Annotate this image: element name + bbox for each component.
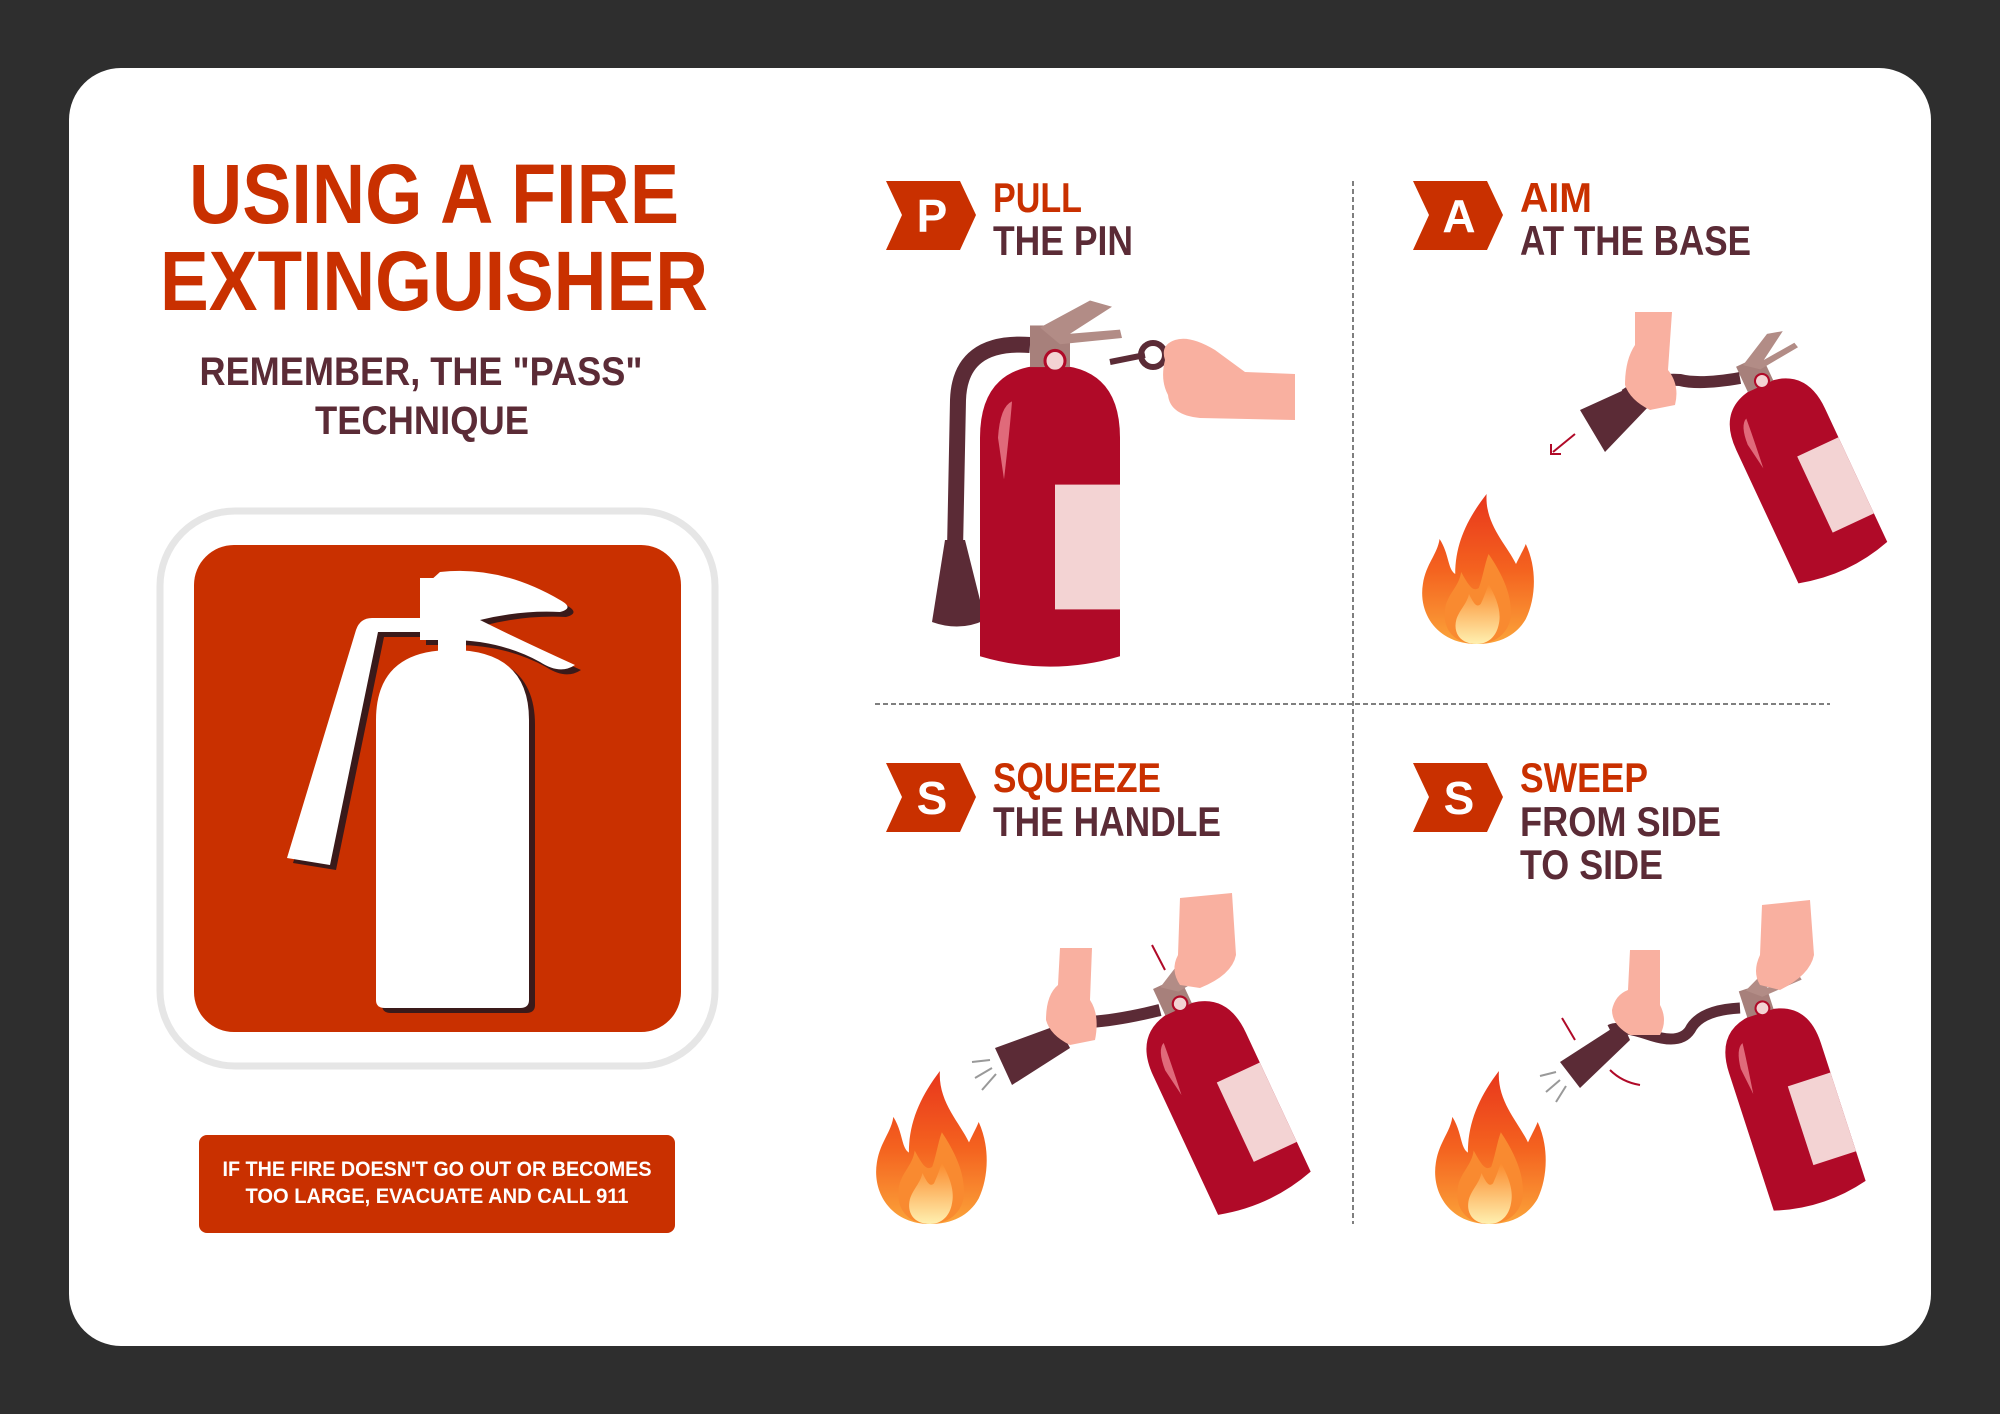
illustration: sweeping: [1435, 900, 1869, 1224]
heading: sweep from side to side: FROM SIDE: [1520, 798, 1721, 845]
panel: squeeze: [876, 754, 1315, 1224]
icon: flame: [1422, 494, 1534, 644]
callout: evacuate warning: [199, 1135, 675, 1233]
badge A: A: [1442, 190, 1476, 242]
title: EXTINGUISHER: [160, 234, 708, 328]
icon: flame: [876, 1071, 987, 1224]
badge S: S: [1444, 772, 1474, 824]
subtitle: REMEMBER, THE "PASS": [200, 350, 642, 394]
panel: aim: [1413, 174, 1891, 644]
illustration: squeezing: [876, 893, 1315, 1224]
icon: fire extinguisher sign: [160, 511, 715, 1066]
badge S: [1413, 763, 1503, 832]
title: [160, 147, 708, 328]
illustration: pulling pin: [932, 301, 1295, 667]
subtitle: [200, 350, 642, 443]
illustration: aiming: [1422, 312, 1891, 644]
panel: pull: [886, 174, 1295, 667]
callout: evacuate warning: TOO LARGE, EVACUATE AND CALL 911: [246, 1185, 629, 1208]
badge S: [886, 763, 976, 832]
heading: aim at the base: [1520, 174, 1751, 264]
heading: pull the pin: PULL: [993, 174, 1082, 221]
title: USING A FIRE: [189, 147, 679, 241]
badge S: S: [917, 772, 947, 824]
subtitle: TECHNIQUE: [315, 399, 529, 443]
heading: sweep from side to side: TO SIDE: [1520, 841, 1663, 888]
heading: sweep from side to side: SWEEP: [1520, 754, 1648, 801]
callout: evacuate warning: IF THE FIRE DOESN'T GO OUT OR BECOMES: [222, 1158, 652, 1181]
heading: squeeze the handle: SQUEEZE: [993, 754, 1161, 801]
badge P: P: [917, 190, 947, 242]
heading: aim at the base: AIM: [1520, 174, 1592, 221]
heading: pull the pin: THE PIN: [993, 217, 1133, 264]
dividers: [1352, 181, 1354, 1224]
icon: flame: [1435, 1071, 1546, 1224]
heading: sweep from side to side: [1520, 754, 1721, 888]
panel: sweep: [1413, 754, 1869, 1224]
heading: squeeze the handle: [993, 754, 1221, 845]
heading: aim at the base: AT THE BASE: [1520, 217, 1751, 264]
heading: squeeze the handle: THE HANDLE: [993, 798, 1221, 845]
heading: pull the pin: [993, 174, 1133, 264]
badge P: [886, 181, 976, 250]
badge A: [1413, 181, 1503, 250]
